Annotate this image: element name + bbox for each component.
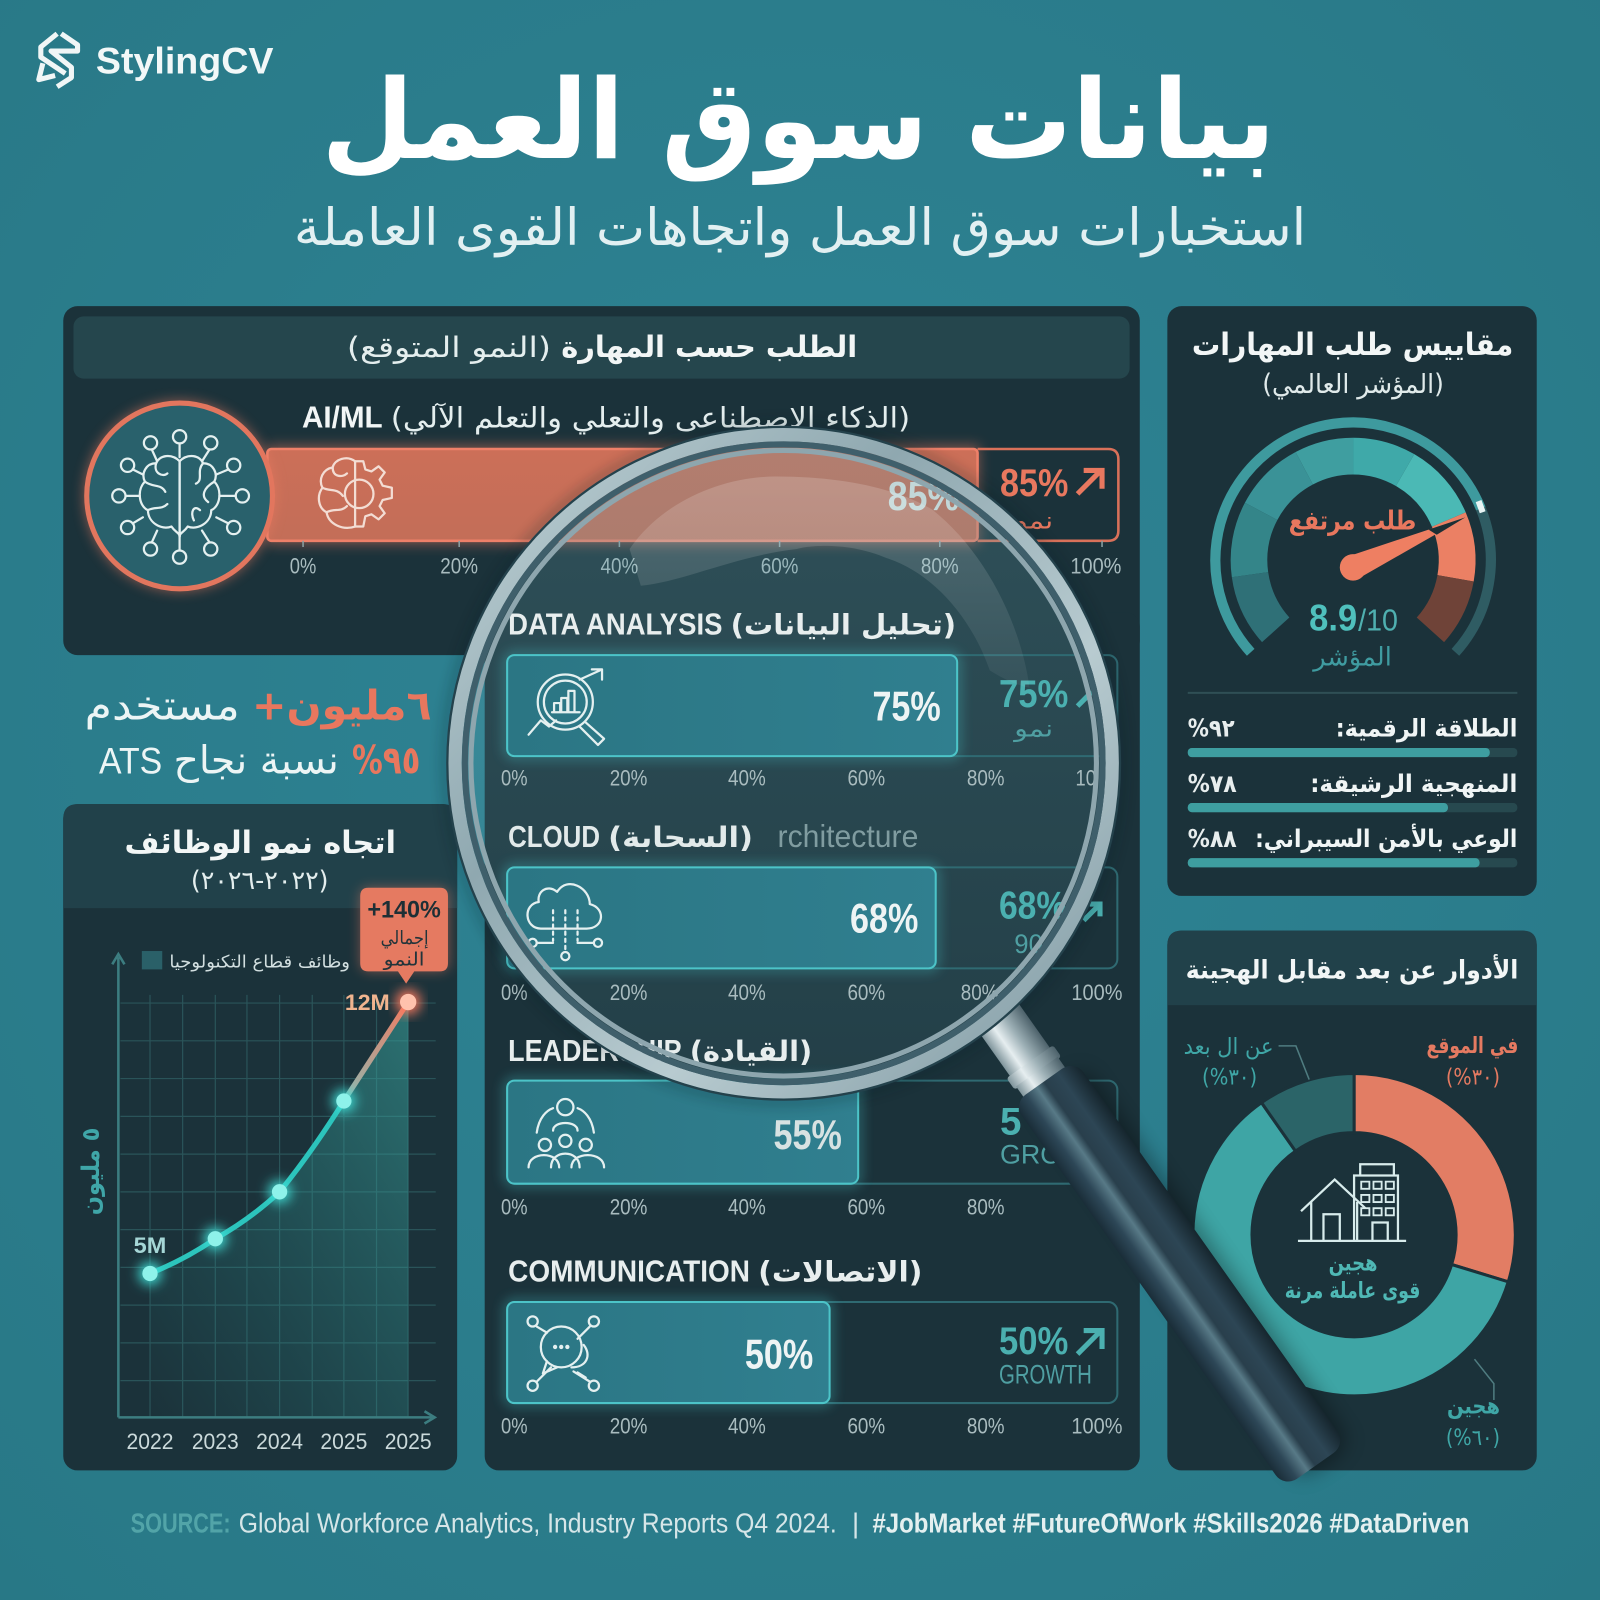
skill row: communication [501, 1255, 1122, 1439]
panel: job growth trend [63, 804, 457, 1470]
stats callout: %٩٥ [352, 738, 420, 783]
axis: 40% [728, 766, 766, 791]
skill row: cloud [501, 818, 1122, 1005]
axis: AI/ML: 60% [761, 553, 798, 578]
panel header: الطلب حسب المهارة [561, 330, 857, 364]
metric: digital fluency 92: %٩٢ [1188, 714, 1235, 743]
skill row: cloud: CLOUD [508, 820, 600, 854]
metric: cyber awareness 88 [1188, 823, 1517, 867]
skill row: cloud: (السحابة) [608, 820, 753, 854]
axis: 100% [1071, 1414, 1122, 1439]
skill row: data analysis: نمو [1013, 715, 1053, 743]
stats callout [85, 681, 432, 783]
row label: AI/ML: AI/ML [302, 401, 383, 435]
skill row: data analysis: 75% [999, 673, 1068, 716]
metric: digital fluency 92: الطلاقة الرقمية: [1336, 714, 1517, 743]
date range: (٢٠٢٦-٢٠٢٢) [191, 866, 329, 896]
callout: +140%: +140% [367, 896, 441, 923]
panel: demand by skill [63, 306, 1140, 1470]
skill row: leadership: 5 [1000, 1101, 1021, 1144]
axis: 60% [847, 1414, 885, 1439]
donut chart [1193, 1073, 1515, 1396]
axis: AI/ML: 40% [601, 553, 638, 578]
line chart: 5M [134, 1233, 166, 1258]
axis: 20% [610, 766, 647, 791]
axis: 40% [728, 980, 766, 1005]
y axis label: ٥ مليون [76, 1128, 105, 1215]
magnifying glass [445, 424, 1353, 1491]
axis: 60% [847, 980, 885, 1005]
axis: AI/ML: 80% [921, 553, 959, 578]
icon: brain and gear [319, 458, 392, 528]
icon: house and office [1298, 1164, 1406, 1241]
line chart: 2025 [320, 1429, 367, 1454]
icon: chart magnifier [529, 669, 604, 745]
axis [501, 1414, 1122, 1439]
axis: AI/ML [290, 541, 1121, 578]
stats callout: مستخدم [85, 681, 240, 729]
axis: 80% [967, 766, 1005, 791]
skill row: communication: (الاتصالات) [758, 1255, 922, 1289]
metric: agile methodology 78 [1188, 769, 1517, 812]
skill row: cloud: 68% [999, 884, 1066, 927]
gauge: طلب مرتفع [1289, 506, 1416, 537]
gauge: 8.9 [1309, 598, 1357, 639]
skill row: leadership [501, 1034, 1117, 1219]
axis: 60% [847, 1194, 885, 1219]
skill row: data analysis: DATA ANALYSIS [508, 608, 722, 642]
gauge: المؤشر [1311, 642, 1392, 672]
footer source line: | [852, 1508, 859, 1539]
subheading: (المؤشر العالمي) [1262, 369, 1444, 400]
bar: AI/ML 85% [267, 445, 980, 545]
metric: cyber awareness 88: %٨٨ [1188, 824, 1237, 853]
gauge [1215, 422, 1491, 672]
logo: StylingCV [39, 34, 274, 87]
lens shadow [445, 424, 1122, 1102]
skill row: data analysis: 75% [872, 682, 941, 729]
label: on-site: (%٣٠) [1446, 1065, 1500, 1091]
label: remote [1184, 1034, 1309, 1091]
axis: AI/ML: 100% [1070, 553, 1121, 578]
label: hybrid: (%٦٠) [1446, 1425, 1500, 1451]
axis: 100% [1071, 980, 1122, 1005]
panel: skill demand metrics [1167, 306, 1537, 896]
label: remote: عن ال بعد [1184, 1034, 1273, 1060]
metric: cyber awareness 88: الوعي بالأمن السيبراني: [1255, 823, 1517, 853]
heading: اتجاه نمو الوظائف [124, 826, 396, 861]
lens rim [447, 427, 1120, 1099]
donut center text [1285, 1250, 1420, 1304]
footer source line: #JobMarket #FutureOfWork #Skills2026 #DataDriven [872, 1508, 1469, 1539]
footer source line: SOURCE: [131, 1508, 231, 1539]
growth box: 85%: نمو [1013, 507, 1053, 535]
heading: مقاييس طلب المهارات [1192, 328, 1513, 363]
axis: 80% [961, 980, 998, 1005]
footer source line [131, 1508, 1469, 1539]
callout: +140%: النمو [383, 949, 424, 970]
axis: 60% [847, 766, 885, 791]
icon: chat network [528, 1316, 599, 1391]
lens glass tint [455, 435, 1112, 1092]
axis: 10 [1076, 766, 1096, 791]
subtitle: استخبارات سوق العمل واتجاهات القوى العاملة [294, 199, 1306, 258]
label: hybrid: هجين [1447, 1393, 1500, 1419]
axis: 0% [501, 980, 528, 1005]
panel header: (النمو المتوقع) [347, 330, 551, 364]
donut center text: قوى عاملة مرنة [1285, 1278, 1420, 1304]
icon: cloud [528, 884, 602, 960]
axis: 0% [501, 1414, 528, 1439]
icon: people [529, 1099, 604, 1167]
skill row: communication: 50% [745, 1330, 813, 1377]
metric: agile methodology 78: %٧٨ [1188, 769, 1237, 798]
legend: وظائف قطاع التكنولوجيا [169, 952, 350, 972]
footer source line: Global Workforce Analytics, Industry Reports Q4 2024. [239, 1508, 837, 1539]
panel header [73, 316, 1130, 379]
icon: AI brain circle [84, 400, 276, 592]
title: بيانات سوق العمل [321, 56, 1276, 185]
skill row: cloud: 68% [850, 895, 918, 942]
axis: 40% [728, 1194, 766, 1219]
growth box: 85% [978, 449, 1118, 541]
axis: AI/ML: 20% [440, 553, 478, 578]
line chart: 2024 [256, 1429, 303, 1454]
donut center text: هجين [1329, 1250, 1378, 1276]
skill row: leadership: 55% [773, 1111, 842, 1158]
label: remote: (%٣٠) [1202, 1065, 1257, 1091]
skill row: cloud: 90 [1014, 929, 1043, 959]
axis: 20% [610, 980, 647, 1005]
line chart [112, 954, 436, 1454]
axis [501, 1194, 1005, 1219]
callout: +140% [360, 888, 449, 984]
skill row: leadership: (القيادة) [690, 1034, 812, 1068]
axis: 0% [501, 766, 528, 791]
axis: 0% [501, 1194, 528, 1219]
skill row: communication: GROWTH [999, 1360, 1092, 1390]
callout: +140%: إجمالي [381, 928, 429, 949]
bar: AI/ML 85%: 85% [888, 473, 959, 519]
axis: 40% [728, 1414, 766, 1439]
axis [501, 980, 1122, 1005]
skill row: communication: COMMUNICATION [508, 1255, 750, 1289]
axis: 20% [610, 1414, 647, 1439]
line chart: 2025 [385, 1429, 432, 1454]
skill row: leadership: GRO [1000, 1139, 1061, 1169]
gauge: /10 [1358, 604, 1398, 638]
growth box: 85%: 85% [1000, 462, 1068, 505]
metric: digital fluency 92 [1188, 714, 1517, 757]
label: on-site [1427, 1033, 1518, 1091]
lens highlight [630, 477, 1030, 688]
skill row: cloud: rchitecture [778, 818, 918, 854]
line chart: 12M [345, 990, 390, 1015]
skill row: data analysis: (تحليل البيانات) [731, 608, 956, 642]
handle [966, 990, 1353, 1491]
skill row: leadership: LEADERSHIP [508, 1034, 682, 1068]
line chart: 2023 [192, 1429, 239, 1454]
axis: 80% [967, 1414, 1005, 1439]
panel: remote vs hybrid [1167, 931, 1537, 1470]
stats callout: ATS [99, 740, 162, 781]
axis: 80% [967, 1194, 1005, 1219]
row label: AI/ML: (الذكاء الاصطناعى والتعلي والتعلم الآلي) [391, 401, 910, 435]
label: on-site: في الموقع [1427, 1033, 1518, 1059]
stats callout: نسبة نجاح [173, 738, 339, 783]
logo: StylingCV: StylingCV [96, 40, 274, 81]
axis [501, 766, 1096, 791]
heading: الأدوار عن بعد مقابل الهجينة [1186, 954, 1518, 986]
axis: AI/ML: 0% [290, 553, 316, 578]
metric: agile methodology 78: المنهجية الرشيقة: [1310, 769, 1517, 798]
skill row: data analysis [501, 608, 1117, 791]
label: hybrid [1446, 1359, 1500, 1451]
stats callout: ٦مليون+ [252, 681, 432, 729]
axis: 20% [610, 1194, 647, 1219]
line chart: 2022 [127, 1429, 173, 1454]
skill row: communication: 50% [999, 1320, 1068, 1363]
